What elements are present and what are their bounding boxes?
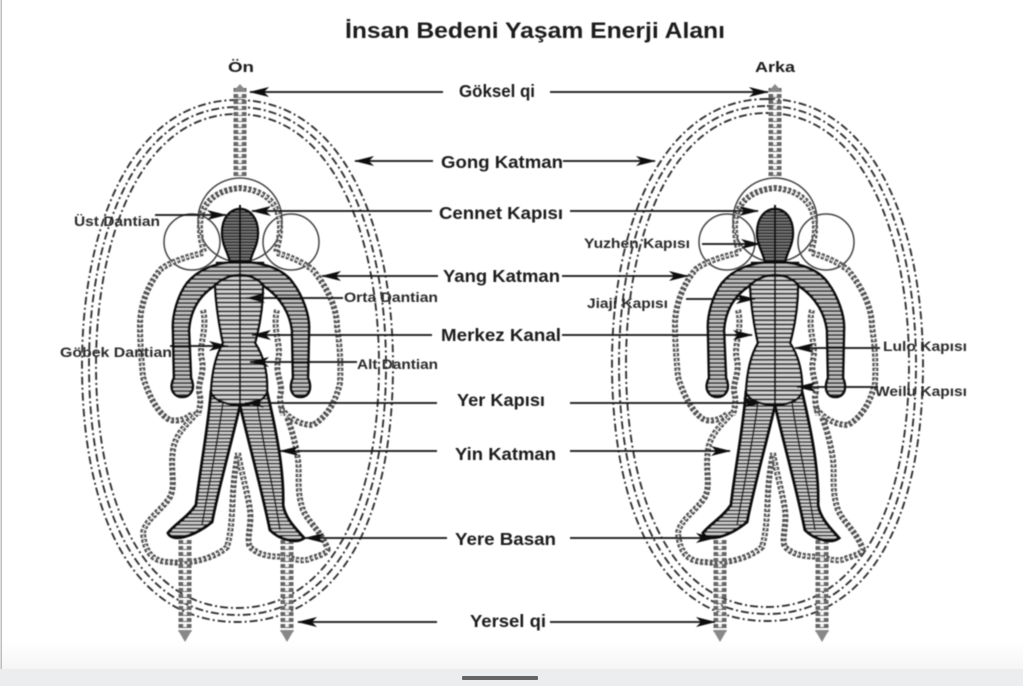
center label: Cennet Kapısı: Cennet Kapısı	[439, 203, 563, 223]
label: Orta Dantian: Orta Dantian	[344, 289, 438, 305]
panel: back figure energy shells	[612, 99, 923, 621]
text labels	[60, 18, 967, 631]
arrows	[155, 92, 880, 622]
center label: Yang Katman: Yang Katman	[443, 266, 560, 286]
center label: Yere Basan: Yere Basan	[455, 529, 556, 549]
label: Jiaji Kapısı: Jiaji Kapısı	[587, 295, 668, 311]
center label: Yersel qi: Yersel qi	[470, 611, 546, 631]
label: Yuzhen Kapısı: Yuzhen Kapısı	[584, 235, 690, 251]
left edge line	[0, 0, 2, 669]
lower fade	[0, 640, 1023, 669]
label: Üst Dantian: Üst Dantian	[74, 213, 160, 229]
center label: Göksel qi: Göksel qi	[459, 81, 535, 101]
label: Weilu Kapısı: Weilu Kapısı	[875, 383, 967, 399]
panel: back body figure	[675, 84, 875, 642]
title: İnsan Bedeni Yaşam Enerji Alanı	[345, 18, 725, 43]
center label: Yer Kapısı: Yer Kapısı	[457, 390, 545, 410]
panel: front figure energy shells	[82, 100, 393, 622]
label: Lulo Kapısı: Lulo Kapısı	[883, 338, 967, 354]
heading: back: Arka	[755, 59, 796, 76]
center label: Gong Katman: Gong Katman	[441, 152, 563, 172]
label: Alt Dantian: Alt Dantian	[357, 356, 438, 372]
center label: Yin Katman: Yin Katman	[455, 444, 556, 464]
heading: front: Ön	[228, 59, 254, 76]
label: Göbek Dantian: Göbek Dantian	[60, 344, 172, 360]
diagram artwork	[82, 84, 923, 642]
panel: front body figure	[140, 84, 340, 642]
scroll handle	[462, 676, 538, 680]
bottom bar	[0, 669, 1023, 686]
center label: Merkez Kanal: Merkez Kanal	[441, 325, 561, 345]
